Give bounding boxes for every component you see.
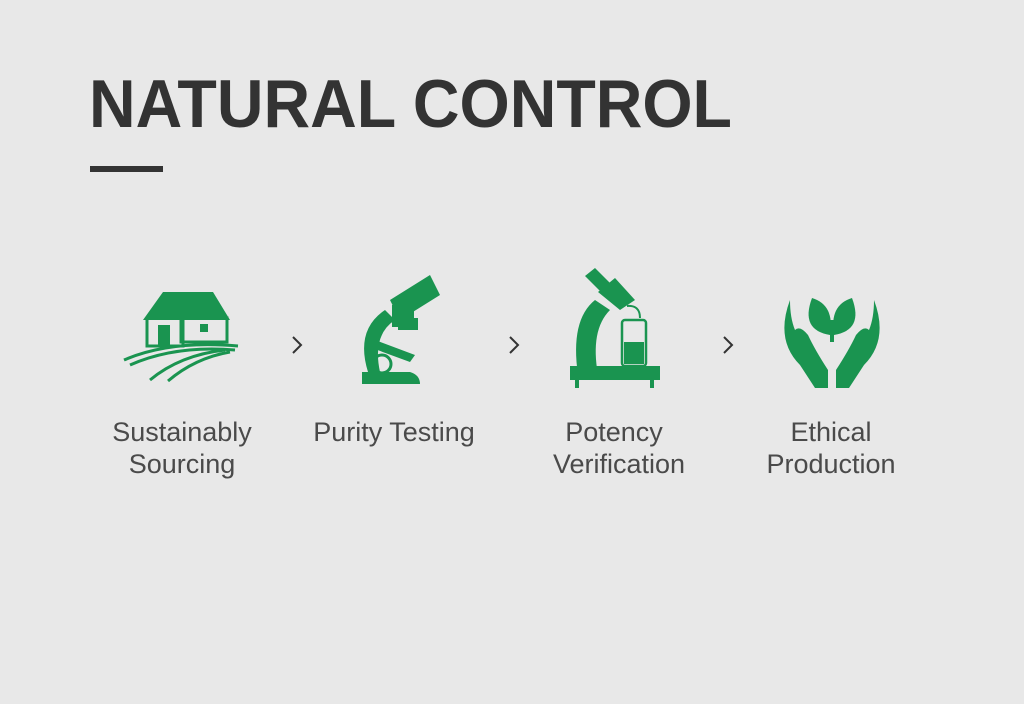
icon: lab microscope with beaker [570, 268, 660, 388]
label: Ethical Production [766, 417, 896, 479]
label: Sustainably Sourcing: Sustainably [112, 417, 252, 447]
icon: hands with plant [784, 298, 880, 388]
title underline [90, 166, 163, 172]
label: Ethical Production: Production [766, 449, 896, 479]
label: Ethical Production: Ethical [790, 417, 872, 447]
label: Potency Verification: Potency [565, 417, 663, 447]
label: Purity Testing: Purity Testing [313, 417, 475, 447]
title: NATURAL CONTROL [89, 66, 732, 142]
icon: microscope [362, 275, 440, 384]
arrow 3 [724, 337, 732, 353]
label: Potency Verification [553, 417, 685, 479]
icon: farmhouse [124, 292, 238, 381]
arrow 1 [293, 337, 301, 353]
label: Sustainably Sourcing [112, 417, 252, 479]
arrow 2 [510, 337, 518, 353]
label: Sustainably Sourcing: Sourcing [129, 449, 235, 479]
label: Potency Verification: Verification [553, 449, 685, 479]
